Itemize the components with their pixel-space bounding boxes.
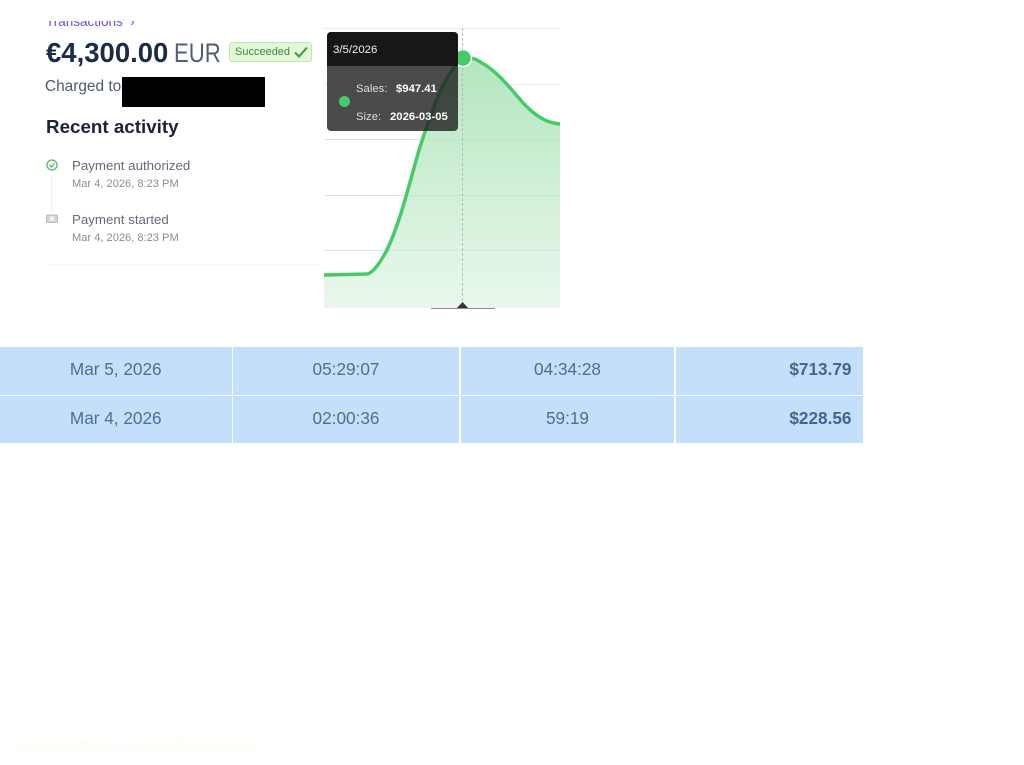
row: Mar 5 [0, 347, 863, 395]
row: Mar 4: Mar 4, 2026 [70, 408, 162, 428]
tooltip size row [356, 111, 448, 123]
earnings table [0, 347, 863, 443]
tooltip size row: 2026-03-05 [390, 111, 448, 123]
row: Mar 5: 04:34:28 [534, 359, 601, 379]
row: Mar 5: 05:29:07 [313, 359, 379, 379]
tooltip sales row: $947.41 [396, 83, 437, 95]
activity item: payment authorized [72, 158, 190, 190]
panel: payment details [45, 21, 324, 265]
activity item: payment started [72, 212, 179, 244]
tooltip legend dot [339, 96, 350, 106]
timeline connector [51, 174, 52, 211]
icon: check mark [294, 46, 308, 58]
tooltip [327, 32, 458, 131]
activity item: payment authorized: Payment authorized [72, 158, 190, 173]
tooltip size row: Size: [356, 111, 381, 123]
status badge: Succeeded [235, 46, 290, 58]
activity item: payment started: Mar 4, 2026, 8:23 PM [72, 232, 179, 244]
trend line [324, 58, 560, 275]
status badge [229, 42, 312, 62]
section divider [46, 264, 324, 265]
recent activity heading: Recent activity [46, 116, 179, 137]
tooltip date header [327, 32, 458, 66]
watermark: www.loyalfans.com/goddesstamar [13, 738, 255, 755]
activity item: payment authorized: Mar 4, 2026, 8:23 PM [72, 178, 179, 190]
redaction block [122, 77, 265, 107]
charged to label: Charged to [45, 78, 121, 95]
area fill [324, 58, 560, 307]
row: Mar 5: $713.79 [789, 359, 852, 379]
axis pointer [431, 302, 495, 308]
row: Mar 4: $228.56 [789, 408, 852, 428]
row: Mar 4 [0, 396, 863, 443]
activity item: payment started: Payment started [72, 212, 169, 227]
tooltip date header: 3/5/2026 [333, 44, 377, 56]
sales area chart [324, 28, 560, 309]
icon: green check circle [46, 159, 58, 171]
icon: payment card [46, 214, 58, 223]
x axis [324, 306, 560, 308]
tooltip sales row [356, 83, 437, 95]
row: Mar 5: Mar 5, 2026 [70, 359, 162, 379]
highlighted data point [454, 50, 472, 66]
hover guide line [462, 28, 464, 305]
tooltip sales row: Sales: [356, 83, 387, 95]
row: Mar 4: 59:19 [546, 408, 589, 428]
row: Mar 4: 02:00:36 [313, 408, 379, 428]
payment amount: €4,300.00 [46, 37, 168, 68]
currency: EUR [174, 38, 221, 68]
